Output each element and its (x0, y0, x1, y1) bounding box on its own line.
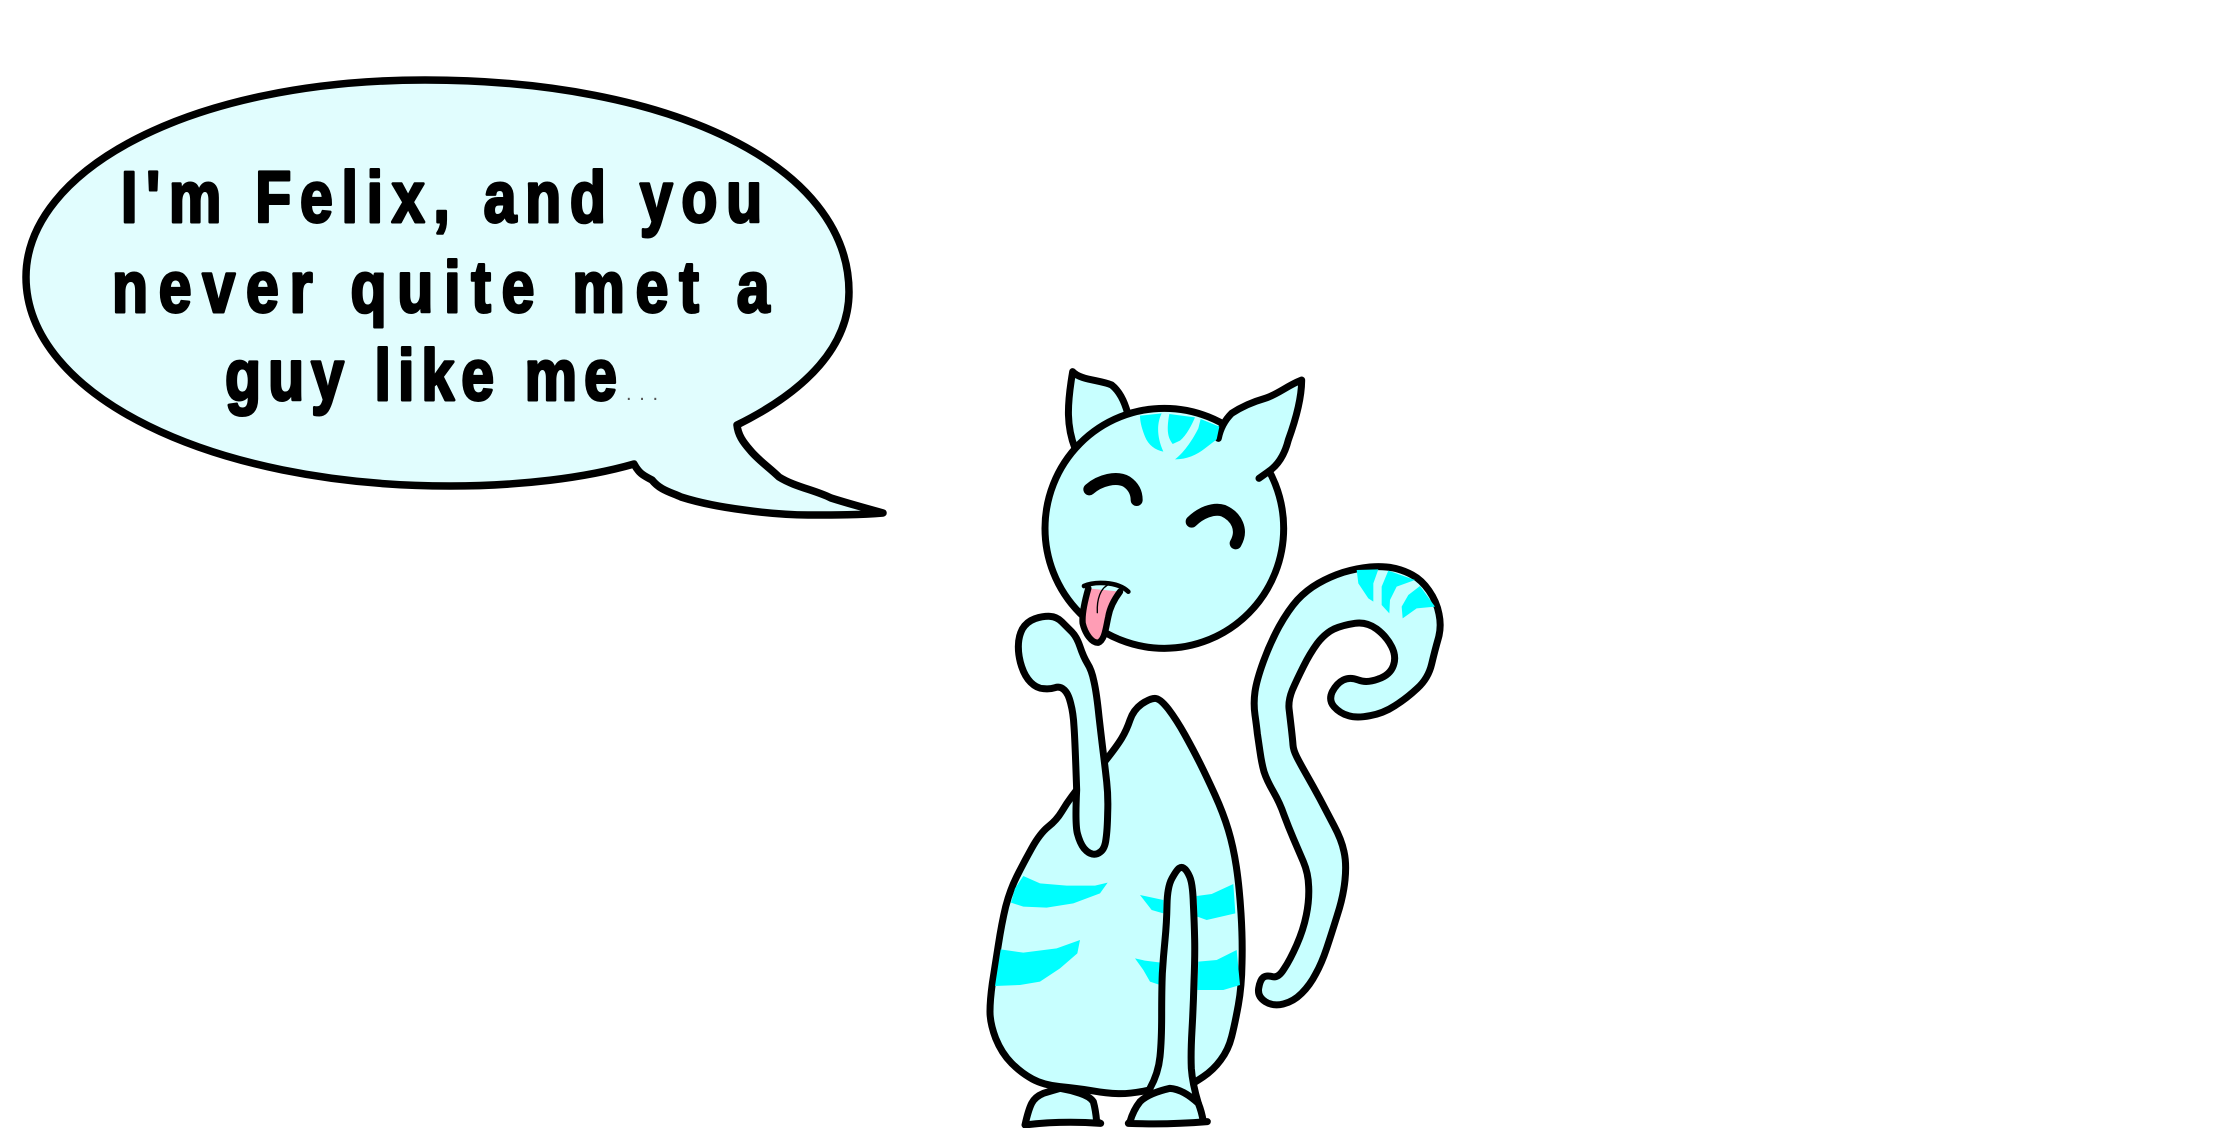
speech bubble (26, 80, 883, 515)
cat: Felix (990, 372, 1440, 1125)
head stripes (1140, 413, 1219, 459)
raised arm and paw (1018, 616, 1108, 854)
right ear (1218, 380, 1302, 478)
eyes (1089, 479, 1239, 543)
standing leg (1150, 867, 1198, 1103)
bubble outline (26, 80, 883, 515)
body stripes (995, 876, 1240, 990)
tail (1254, 567, 1440, 1005)
tail stripes (1357, 569, 1435, 618)
bubble text: guy like me (225, 334, 617, 415)
left ear (1068, 372, 1128, 448)
bubble text: I'm Felix, and you (121, 156, 762, 237)
right foot (1128, 1088, 1207, 1124)
bubble text: never quite met a (112, 246, 771, 327)
bubble text (112, 156, 771, 415)
body (990, 698, 1242, 1094)
ellipsis: ... (626, 383, 658, 405)
tongue and mouth (1082, 583, 1128, 643)
left foot (1025, 1088, 1101, 1125)
head (1045, 408, 1284, 648)
